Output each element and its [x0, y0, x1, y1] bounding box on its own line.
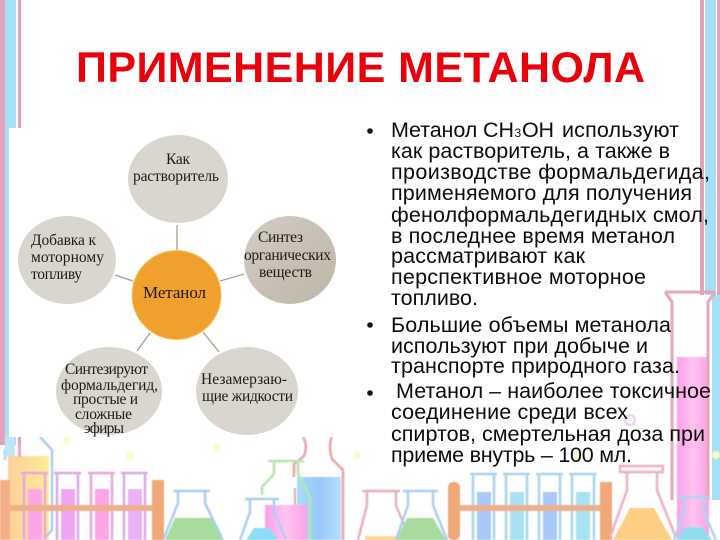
node: organic synthesis: органических — [244, 247, 331, 264]
test tube rack, left — [0, 473, 164, 540]
tall cylinder with pink liquid — [665, 292, 715, 540]
node: synthesis of formaldehyde, ethers: эфиры — [84, 420, 125, 437]
node: motor fuel additive: моторному — [31, 249, 104, 266]
bullet 2 — [367, 313, 680, 378]
node: synthesis of formaldehyde, ethers: сложные — [75, 406, 132, 423]
node: synthesis of formaldehyde, ethers: простые и — [73, 391, 138, 408]
green flask, centre — [396, 491, 447, 540]
bullet 1: как растворитель, а также в — [391, 139, 670, 163]
bullet 1: перспективное моторное — [391, 265, 646, 289]
methanol applications diagram — [18, 135, 336, 437]
bullet 1: производстве формальдегида, — [391, 160, 710, 184]
bullet 3: соединение среди всех — [391, 400, 628, 424]
node: as a solvent: Как — [166, 151, 190, 168]
node: antifreeze liquids: щие жидкости — [202, 388, 293, 405]
bullet 2: используют при добыче и — [391, 334, 648, 358]
node: organic synthesis: веществ — [259, 264, 312, 281]
node: motor fuel additive: топливу — [31, 266, 82, 283]
bullet 1: применяемого для получения — [391, 181, 692, 205]
green flask, left — [164, 491, 224, 540]
node: antifreeze liquids — [196, 347, 298, 435]
node: motor fuel additive: Добавка к — [31, 232, 96, 249]
bullet 1: в последнее время метанол — [391, 224, 675, 248]
bullet 3: приеме внутрь – 100 мл. — [391, 443, 632, 467]
node: synthesis of formaldehyde, ethers: формальдегид, — [61, 377, 158, 394]
bullet 2: транспорте природного газа. — [391, 354, 680, 378]
large bottle, left — [5, 437, 52, 540]
right decorative border — [700, 0, 720, 500]
node: motor fuel additive — [18, 216, 116, 304]
bullet 1: рассматривают как — [391, 244, 586, 268]
test tube rack, right — [448, 474, 612, 540]
bullet 1: топливо. — [391, 286, 478, 310]
white diagram panel — [9, 128, 350, 437]
node: methanol centre: Метанол — [143, 283, 207, 302]
bullet 1: используют — [562, 118, 679, 142]
bullet 1: фенолформальдегидных смол, — [391, 203, 709, 227]
orange flask, right — [610, 466, 676, 540]
title: ПРИМЕНЕНИЕ МЕТАНОЛА — [76, 44, 645, 92]
node: as a solvent: растворитель — [133, 168, 219, 185]
blue flask, right — [674, 497, 716, 540]
connector lines — [115, 225, 244, 352]
decorative stars — [63, 436, 720, 460]
node: organic synthesis — [244, 216, 336, 304]
left decorative border — [0, 0, 21, 445]
node: methanol centre — [132, 250, 221, 340]
bullet 3 — [367, 379, 711, 467]
bullet 2: Большие объемы метанола — [391, 313, 671, 337]
decorative ring — [625, 415, 635, 425]
node: synthesis of formaldehyde, ethers: Синтезируют — [65, 361, 148, 378]
node: organic synthesis: Синтез — [258, 229, 303, 246]
bullet 3: спиртов, смертельная доза при — [391, 422, 705, 446]
tall bottle with blue liquid — [294, 437, 343, 540]
small blue flask — [240, 499, 286, 540]
node: antifreeze liquids: Незамерзаю- — [201, 371, 287, 388]
bullet text block — [367, 118, 711, 467]
flask with pink liquid — [262, 461, 310, 540]
bullet 1 — [367, 118, 710, 310]
node: as a solvent — [128, 135, 228, 223]
laboratory glassware illustration — [0, 292, 720, 540]
flask with orange liquid, centre — [358, 491, 404, 540]
node: synthesis of formaldehyde, ethers — [56, 347, 162, 437]
bullet 1: 3 — [514, 126, 522, 140]
bullet 1: ОН — [522, 118, 554, 142]
bullet 3: Метанол – наиболее токсичное — [396, 379, 711, 403]
bullet 1: Метанол СН — [391, 118, 514, 142]
